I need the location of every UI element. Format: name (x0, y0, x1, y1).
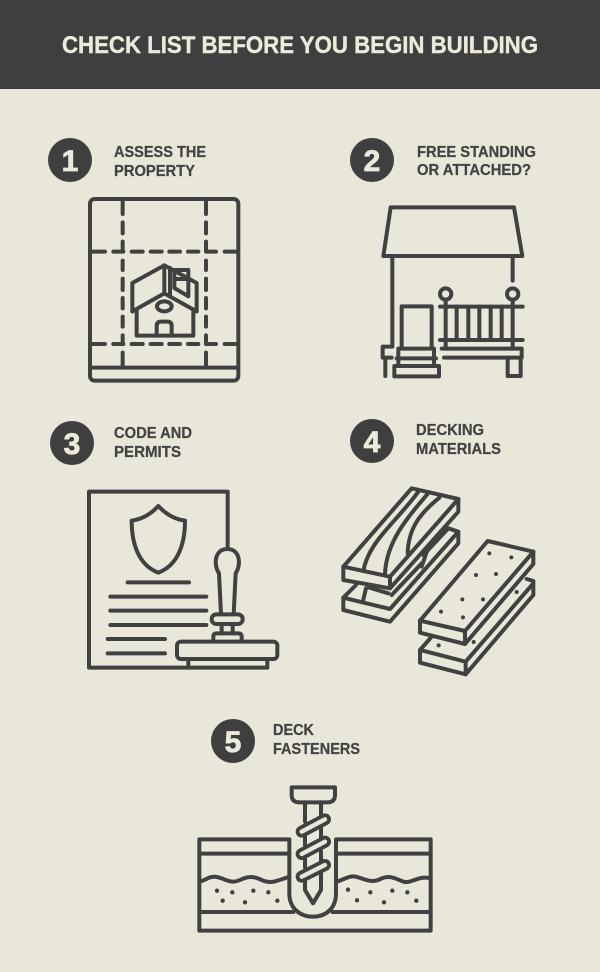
step 3 label (114, 425, 192, 461)
step 5 badge (211, 719, 255, 763)
icon: property plan with house (90, 199, 238, 381)
step 3 badge: 3 (64, 428, 80, 461)
step 1 label: PROPERTY (114, 163, 195, 180)
step 2 label (417, 144, 536, 179)
icon: permit document and stamp (89, 492, 277, 668)
step 4 badge: 4 (364, 426, 381, 459)
step 4 label: MATERIALS (416, 441, 501, 458)
step 1 label (114, 144, 206, 180)
step 3 label: CODE AND (114, 425, 192, 442)
wood planks (343, 488, 458, 622)
step 1 label: ASSESS THE (114, 144, 206, 161)
icon: house (132, 265, 197, 336)
header banner (0, 0, 600, 89)
step 1 badge: 1 (62, 145, 78, 178)
step 4 badge (350, 419, 394, 463)
step 5 label (273, 722, 360, 758)
icon: screw (292, 787, 335, 903)
step 3 badge (50, 421, 94, 465)
composite planks (420, 541, 533, 674)
step 5 label: FASTENERS (273, 741, 360, 758)
icon: screw in deck board (199, 787, 431, 931)
step 2 badge (350, 138, 394, 182)
step 3 label: PERMITS (114, 444, 181, 461)
step 2 badge: 2 (364, 145, 380, 178)
step 4 label: DECKING (416, 422, 484, 439)
icon: house with porch (383, 207, 523, 376)
title: CHECK LIST BEFORE YOU BEGIN BUILDING (62, 32, 538, 59)
step 2 label: FREE STANDING (417, 144, 536, 161)
icon: decking planks (343, 488, 533, 674)
icon: stamp (177, 549, 277, 668)
step 1 badge (48, 138, 92, 182)
step 2 label: OR ATTACHED? (417, 162, 531, 179)
step 5 badge: 5 (225, 726, 241, 759)
step 4 label (416, 422, 501, 458)
step 5 label: DECK (273, 722, 314, 739)
